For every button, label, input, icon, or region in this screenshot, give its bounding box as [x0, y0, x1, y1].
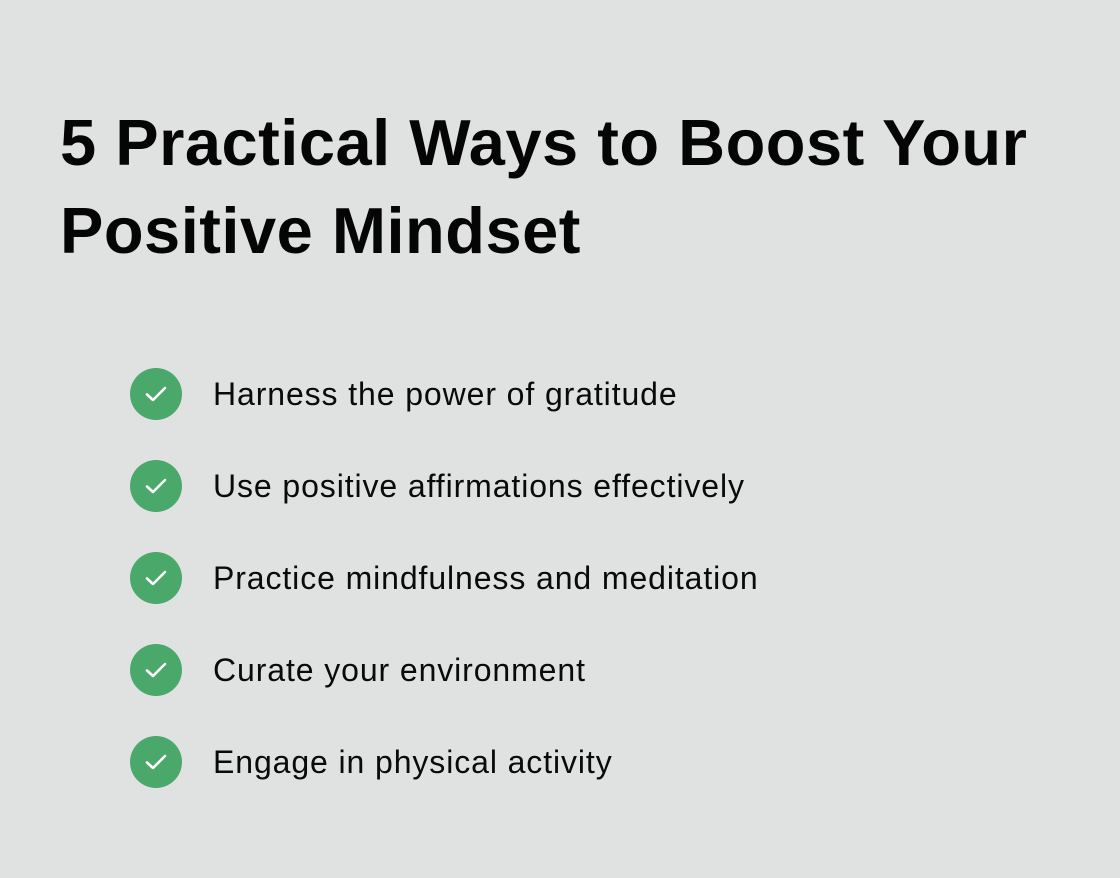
list item 1	[130, 368, 678, 420]
text: Use positive affirmations effectively	[213, 468, 745, 504]
text: Harness the power of gratitude	[213, 376, 678, 412]
icon: check circle	[130, 552, 182, 604]
title: 5 Practical Ways to Boost Your	[60, 106, 1027, 179]
icon: check circle	[130, 736, 182, 788]
list item 3	[130, 552, 759, 604]
text: Curate your environment	[213, 652, 586, 688]
text: Engage in physical activity	[213, 744, 613, 780]
icon: check circle	[130, 644, 182, 696]
list item 4	[130, 644, 586, 696]
title	[60, 106, 1027, 267]
list item 5	[130, 736, 613, 788]
title: Positive Mindset	[60, 194, 581, 267]
list item 2	[130, 460, 745, 512]
icon: check circle	[130, 368, 182, 420]
icon: check circle	[130, 460, 182, 512]
text: Practice mindfulness and meditation	[213, 560, 759, 596]
